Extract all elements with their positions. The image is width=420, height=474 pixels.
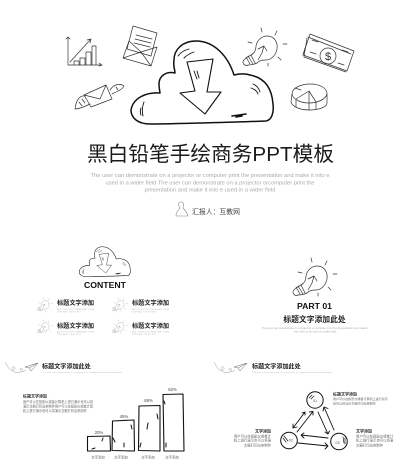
part description: into a film to be used in a wider field bbox=[294, 330, 337, 334]
content item 1 bbox=[37, 298, 94, 314]
bar slide text block: 演示文稿打印出来制作用户可以在投影仪或者计算 bbox=[23, 404, 94, 408]
bar chart: 20% bbox=[95, 430, 103, 435]
cycle text 02: 文字添加 bbox=[255, 428, 271, 434]
icon: money stack: $ bbox=[325, 51, 331, 63]
bar slide text block: 标题文字添加 bbox=[23, 392, 47, 398]
paper plane bbox=[5, 362, 38, 373]
icon: light bulb bbox=[243, 28, 287, 66]
description: used in a wider field The user can demonstrate on a projector orcomputer print the bbox=[106, 180, 314, 186]
slide: bar chart bbox=[5, 362, 184, 460]
description bbox=[90, 173, 330, 194]
part subtitle: 标题文字添加此处 bbox=[283, 314, 346, 324]
cycle text 02 bbox=[234, 428, 272, 447]
bar chart bbox=[88, 387, 184, 460]
cycle text 02: 用户可以在投影仪或者计 bbox=[234, 434, 272, 439]
content item 4: 标题文字添加 bbox=[132, 322, 169, 330]
content item 4: TEXT ADD YOUR TEXT bbox=[132, 333, 157, 336]
cycle text 02: 文稿打印出来制作 bbox=[244, 442, 272, 447]
content item 2: 标题文字添加 bbox=[132, 299, 169, 307]
presenter: 汇报人：互教网 bbox=[192, 207, 240, 216]
cycle slide heading: 标题文字添加此处 bbox=[252, 362, 301, 370]
main cloud with download arrow bbox=[131, 41, 273, 124]
content cloud bbox=[79, 247, 130, 277]
bar chart: 82% bbox=[168, 387, 177, 392]
part description: The user can demonstrate on a projector or computer print the presentation and make it bbox=[262, 327, 368, 330]
icon: open envelope bbox=[123, 26, 157, 66]
bar slide heading: 标题文字添加此处 bbox=[42, 362, 91, 370]
cycle text 01 bbox=[333, 390, 388, 405]
content item 1: 标题文字添加 bbox=[57, 299, 94, 307]
bar slide text block: 用户可以在投影仪或者计算机上进行演示也可以将 bbox=[23, 399, 94, 404]
content item 3: TEXT ADD YOUR TEXT bbox=[57, 333, 82, 336]
bar slide text block: 机上进行演示也可以将演示文稿打印出来制作 bbox=[23, 408, 88, 413]
bar slide subheading: The user can demonstrate on a projector or computer print the presentation bbox=[42, 371, 123, 374]
content item 1: TEXT ADD YOUR TEXT bbox=[57, 310, 82, 314]
icon: flying envelope bbox=[75, 84, 124, 109]
bar chart: 文字添加 bbox=[165, 454, 179, 460]
content item 1: ADD YOUR TEXT HERE AND YOUR bbox=[57, 308, 94, 311]
paper plane bbox=[214, 362, 247, 373]
cycle text 02: 机上进行演示也可以将演 bbox=[234, 438, 272, 443]
content item 2 bbox=[112, 298, 169, 314]
icon: pie chart bbox=[291, 84, 327, 110]
cycle text 03 bbox=[356, 428, 394, 447]
cycle text 01: 也可以将演示文稿打印出来制作 bbox=[333, 400, 376, 405]
cycle diagram: 02 bbox=[289, 438, 293, 442]
icon: line chart bbox=[66, 37, 102, 66]
description: The user can demonstrate on a projector or computer print the presentation and make it into e bbox=[90, 173, 330, 179]
part bulb bbox=[293, 258, 337, 296]
presenter bbox=[176, 202, 240, 216]
description: presentation and make it into e used in a wider field bbox=[144, 188, 276, 194]
cycle diagram: 01 bbox=[313, 399, 317, 403]
cycle text 03: 用户可以在投影仪或者计 bbox=[356, 434, 394, 439]
cycle text 03: 文字添加 bbox=[356, 428, 372, 434]
content item 2: ADD YOUR TEXT HERE AND YOUR bbox=[132, 308, 169, 311]
cycle slide subheading: The user can demonstrate on a projector or computer print the presentation bbox=[252, 371, 333, 374]
bar chart: 文字添加 bbox=[91, 454, 105, 460]
cycle text 01: 标题文字添加 bbox=[333, 390, 357, 396]
content item 2: TEXT ADD YOUR TEXT bbox=[132, 310, 157, 314]
bar slide text block bbox=[23, 392, 94, 413]
bar chart: 文字添加 bbox=[114, 454, 128, 460]
bar chart: 文字添加 bbox=[141, 454, 155, 460]
bar chart: 68% bbox=[144, 398, 153, 403]
content item 3 bbox=[37, 320, 94, 336]
cycle diagram bbox=[281, 392, 347, 450]
slide: content bbox=[37, 247, 169, 336]
content heading: CONTENT bbox=[84, 280, 127, 290]
cycle text 03: 机上进行演示也可以将演 bbox=[356, 438, 394, 443]
part heading: PART 01 bbox=[297, 301, 332, 311]
slide: part 01 bbox=[262, 258, 368, 334]
title: 黑白铅笔手绘商务PPT模板 bbox=[87, 143, 334, 166]
bar chart: 45% bbox=[120, 414, 128, 419]
content item 3: ADD YOUR TEXT HERE AND YOUR bbox=[57, 330, 94, 334]
slide: cycle diagram bbox=[214, 362, 394, 450]
icon: money stack bbox=[303, 34, 354, 72]
content item 4 bbox=[112, 320, 169, 336]
cycle text 01: 用户可以在投影仪或者计算机上进行演示 bbox=[333, 396, 388, 401]
content item 4: ADD YOUR TEXT HERE AND YOUR bbox=[132, 330, 169, 334]
content item 3: 标题文字添加 bbox=[57, 322, 94, 330]
cycle text 03: 文稿打印出来制作 bbox=[356, 442, 384, 447]
cycle diagram: 03 bbox=[335, 441, 340, 445]
part description bbox=[262, 327, 368, 334]
